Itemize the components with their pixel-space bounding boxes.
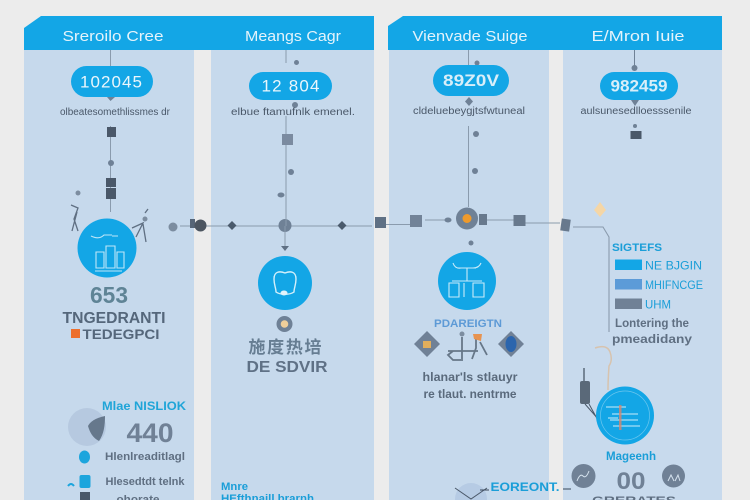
vertical connector: column 4 <box>630 50 642 139</box>
icon: circle badge, column 2 <box>258 256 312 310</box>
panel: column 1 <box>24 50 194 500</box>
stat number: 440 <box>126 418 174 448</box>
text block: column 3 <box>422 370 518 401</box>
heading: column 4: E/Mron Iuie <box>592 28 684 45</box>
label: column 1 first line: TNGEDRANTI <box>62 310 166 327</box>
list row one <box>79 450 90 464</box>
list row three <box>80 492 90 500</box>
label: column 2 bottom: Mnre <box>221 481 248 493</box>
caption: column 1: olbeatesomethlissmes dr <box>60 107 171 118</box>
legend: column 4: UHM <box>645 298 671 312</box>
legend note: Lontering the <box>615 316 689 330</box>
legend: column 4 <box>612 242 703 312</box>
pie icon <box>68 408 106 446</box>
label: column 2 bottom <box>221 481 314 500</box>
stat pill: column 3 <box>433 65 509 96</box>
panel: column 4 <box>563 50 722 500</box>
icon: right diamond, column 3 <box>498 331 524 357</box>
stat block: column 1 bottom <box>68 399 186 500</box>
caption: column 2: elbue ftamufnlk emenel. <box>231 107 355 118</box>
icon: device and cables <box>580 347 611 424</box>
icon: figures around circle, column 1 <box>71 190 148 242</box>
icon: ring marker, column 2 <box>276 316 292 332</box>
vertical connector: column 2 <box>278 50 299 251</box>
stat pill: column 1 <box>71 66 153 101</box>
text block: column 3: re tlaut. nentrme <box>424 387 517 401</box>
legend: column 4: NE BJGIN <box>645 258 702 272</box>
stat number: column 4: 00 <box>616 468 646 495</box>
icon: circle badge, column 3 <box>438 252 496 310</box>
label: column 2: DE SDVIR <box>246 359 328 376</box>
icon: circle badge, column 1 <box>78 218 136 278</box>
stat pill: column 1: 102045 <box>80 72 142 92</box>
label: column 1 second line: TEDEGPCI <box>82 326 160 342</box>
legend note <box>612 316 692 346</box>
header band: right <box>388 16 722 50</box>
label: column 4 badge: Mageenh <box>606 451 656 463</box>
heading: column 3: Vienvade Suige <box>412 28 528 45</box>
panel: column 2 <box>211 50 374 500</box>
list row two <box>80 475 90 488</box>
stat block: column 1 bottom: Hlesedtdt telnk <box>106 476 185 488</box>
stat number: column 1: 653 <box>90 282 128 308</box>
vertical connector: column 3 <box>465 50 480 246</box>
stat pill: column 2: 12 804 <box>262 76 320 96</box>
header band: left <box>24 16 374 50</box>
heading: column 1: Sreroilo Cree <box>62 28 164 45</box>
horizontal connector line with nodes <box>168 202 609 332</box>
text block: column 3: hlanar'ls stlauyr <box>422 370 518 384</box>
heading: column 2: Meangs Cagr <box>245 28 341 45</box>
icon: right dial <box>662 464 685 488</box>
callout: column 3 bottom: EOREONT. <box>490 480 560 494</box>
legend note: pmeadidany <box>612 332 692 346</box>
stat heading: Mlae NISLIOK <box>102 399 186 413</box>
legend title: SIGTEFS <box>612 242 662 254</box>
stat pill: column 4: 982459 <box>610 76 668 96</box>
label: column 3: PDAREIGTN <box>434 318 502 330</box>
CJK label: column 2: 施度热培 <box>248 337 322 357</box>
vertical connector: column 1 <box>106 50 116 212</box>
legend: column 4: MHIFNCGE <box>645 278 703 292</box>
panel: column 3 <box>389 50 549 500</box>
stat block: column 1 bottom: Hlenlreaditlagl <box>105 451 185 463</box>
caption: column 3: cldeluebeygjtsfwtuneal <box>413 106 525 117</box>
icon: figures, column 3 <box>448 332 487 360</box>
stat pill: column 2 <box>249 72 332 100</box>
callout: column 3 bottom <box>455 480 571 500</box>
stat pill: column 3: 89Z0V <box>443 71 500 90</box>
icon: left dial <box>572 464 596 488</box>
stat pill: column 4 <box>600 72 678 100</box>
icon: circle badge, column 4 <box>596 386 654 444</box>
caption: column 4: aulsunesedlloesssenile <box>580 106 692 117</box>
icon: left diamond, column 3 <box>414 331 440 357</box>
